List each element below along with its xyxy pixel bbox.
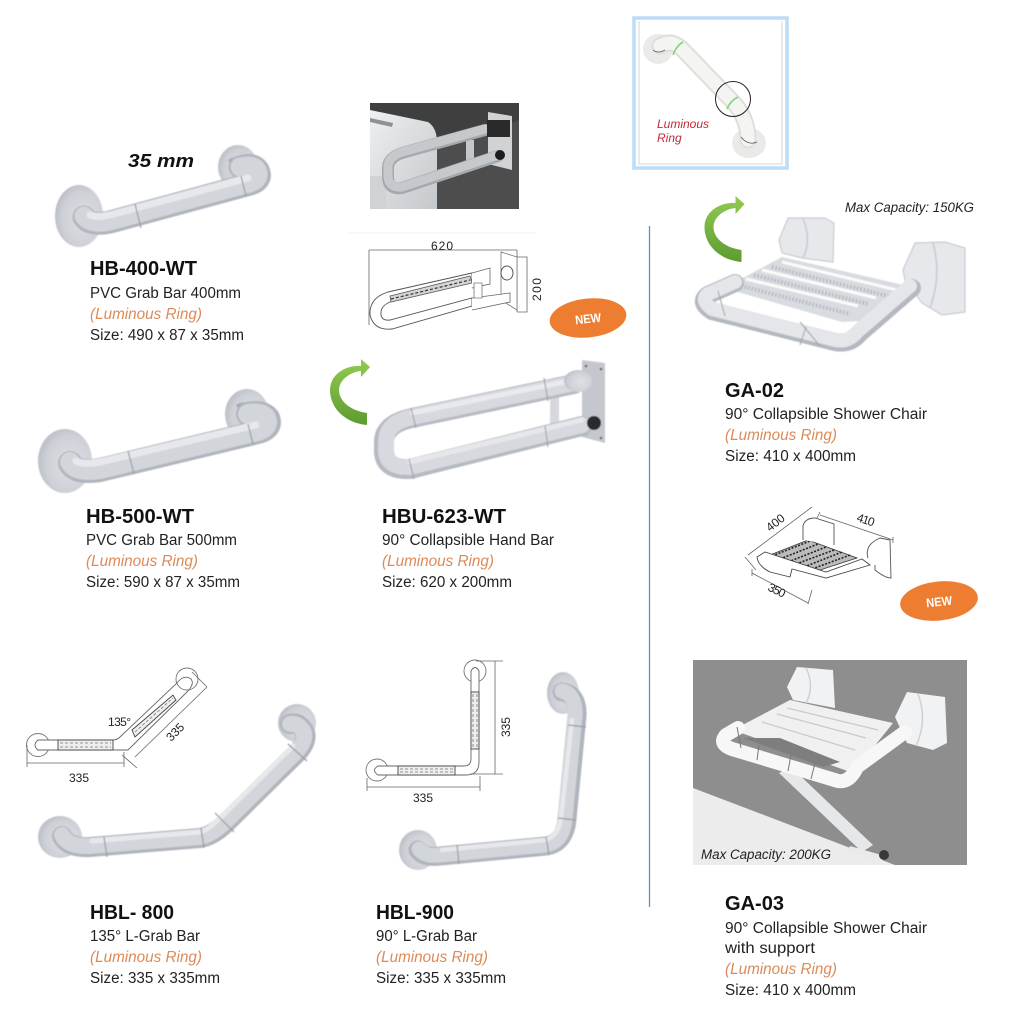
dimension drawing: HBL-900: 335: [413, 791, 433, 805]
text block: HBL-900: [376, 901, 506, 987]
text block: GA-02: Size: 410 x 400mm: [725, 448, 856, 465]
text block: HBL-900: Size: 335 x 335mm: [376, 970, 506, 987]
text block: HB-400-WT: PVC Grab Bar 400mm: [90, 285, 241, 302]
dimension drawing: HBL-800: 335: [163, 720, 187, 744]
text block: GA-03: (Luminous Ring): [725, 961, 837, 978]
dimension drawing: GA-02 chair: 400: [763, 511, 788, 534]
text block: HB-500-WT: HB-500-WT: [86, 505, 194, 528]
text block: HB-500-WT: (Luminous Ring): [86, 553, 198, 570]
text block: HB-500-WT: PVC Grab Bar 500mm: [86, 532, 237, 549]
inset: luminous ring detail: Ring: [657, 131, 682, 145]
text block: HBU-623-WT: [382, 505, 554, 591]
badge: NEW: [548, 295, 628, 341]
label: max capacity 200KG: Max Capacity: 200KG: [701, 847, 831, 862]
arrow: rotation, hand bar: [330, 359, 370, 425]
text block: HBL-800: (Luminous Ring): [90, 949, 202, 966]
dimension drawing: GA-02 chair: [745, 507, 893, 604]
text block: HB-500-WT: Size: 590 x 87 x 35mm: [86, 574, 240, 591]
dimension drawing: HBL-800: [26, 668, 207, 785]
badge: NEW: [898, 578, 980, 624]
text block: GA-03: GA-03: [725, 892, 784, 915]
text block: HBL-800: Size: 335 x 335mm: [90, 970, 220, 987]
text block: HBU-623-WT: (Luminous Ring): [382, 553, 494, 570]
dimension drawing: HBL-800: 135°: [108, 715, 131, 729]
text block: HBL-800: [90, 901, 220, 987]
dimension drawing: GA-02 chair: 350: [766, 580, 788, 601]
divider line: [648, 226, 650, 907]
dimension drawing: GA-02 chair: 410: [855, 511, 877, 530]
badge: NEW: NEW: [574, 311, 602, 327]
text block: HBL-800: HBL- 800: [90, 901, 174, 924]
text block: HB-500-WT: [86, 505, 240, 591]
photo: collapsible hand bar on toilet: [370, 103, 519, 209]
text block: GA-02: (Luminous Ring): [725, 427, 837, 444]
product image: HB-500-WT grab bar: [38, 389, 269, 493]
inset: luminous ring detail: [634, 18, 787, 168]
text block: HBL-900: 90° L-Grab Bar: [376, 928, 477, 945]
product image: HB-400-WT grab bar: [55, 145, 259, 247]
text block: GA-03: 90° Collapsible Shower Chair: [725, 920, 927, 937]
text block: HB-400-WT: [90, 257, 244, 344]
text block: HBU-623-WT: Size: 620 x 200mm: [382, 574, 512, 591]
text block: GA-02: [725, 379, 927, 465]
dimension drawing: HBU-623: [347, 233, 544, 329]
arrow: rotation, shower chair: [704, 196, 744, 262]
text block: GA-02: 90° Collapsible Shower Chair: [725, 406, 927, 423]
text block: HBU-623-WT: HBU-623-WT: [382, 505, 506, 528]
text block: HBU-623-WT: 90° Collapsible Hand Bar: [382, 532, 554, 549]
text block: HB-400-WT: Size: 490 x 87 x 35mm: [90, 327, 244, 344]
text block: HB-400-WT: HB-400-WT: [90, 257, 197, 280]
dimension drawing: HBL-900: [366, 660, 513, 805]
text block: GA-02: GA-02: [725, 379, 784, 402]
text block: HBL-900: HBL-900: [376, 901, 454, 924]
photo: GA-03 chair with support: [693, 660, 967, 865]
label: max capacity 150KG: Max Capacity: 150KG: [845, 200, 974, 215]
product image: HBL-800 L-grab bar: [38, 704, 316, 858]
text block: GA-03: with support: [724, 940, 816, 957]
dimension drawing: HBL-900: 335: [499, 717, 513, 737]
dimension drawing: HBL-800: 335: [69, 771, 89, 785]
text block: GA-03: [724, 892, 927, 999]
text block: HB-400-WT: (Luminous Ring): [90, 306, 202, 323]
text block: HBL-900: (Luminous Ring): [376, 949, 488, 966]
label: 35 mm: 35 mm: [128, 151, 194, 171]
dimension drawing: HBU-623: 620: [431, 239, 454, 253]
product image: HBL-900 L-grab bar: [399, 672, 586, 870]
text block: GA-03: Size: 410 x 400mm: [725, 982, 856, 999]
badge: NEW: NEW: [925, 594, 953, 610]
text block: HBL-800: 135° L-Grab Bar: [90, 928, 200, 945]
dimension drawing: HBU-623: 200: [530, 278, 544, 301]
inset: luminous ring detail: Luminous: [657, 117, 709, 131]
product image: HBU-623-WT hand bar: [384, 360, 605, 479]
product image: GA-02 shower chair: [704, 218, 965, 346]
